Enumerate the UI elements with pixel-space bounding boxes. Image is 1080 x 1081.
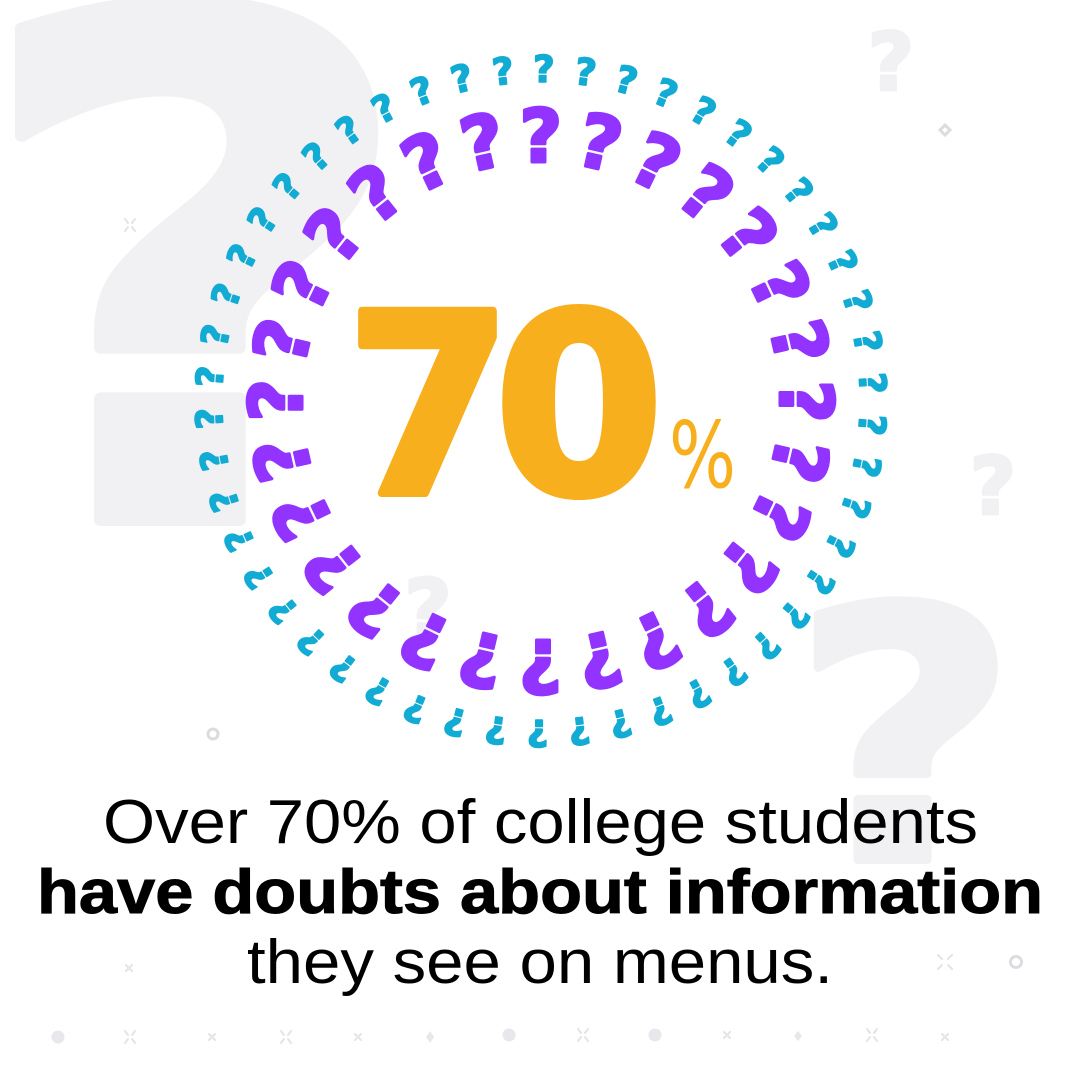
big statistic 70%: 0 [494,261,664,552]
background question marks: ? [791,535,1019,943]
background question marks: ? [404,563,452,658]
background question marks: ? [970,440,1016,533]
background question marks: ? [868,16,914,109]
outer ring of blue question marks: ?????????????????????????????????????????????????? [194,54,888,748]
caption: have doubts about information [37,858,1043,927]
big statistic 70%: 7 [346,261,512,552]
big statistic 70% [346,261,736,552]
caption [37,788,1043,997]
caption: Over 70% of college students [103,788,978,857]
decorative small shapes [52,125,1022,1044]
caption: they see on menus. [247,928,833,997]
inner ring of purple question marks: ???????????????????????????? [246,106,836,696]
big statistic 70%: % [669,402,736,509]
